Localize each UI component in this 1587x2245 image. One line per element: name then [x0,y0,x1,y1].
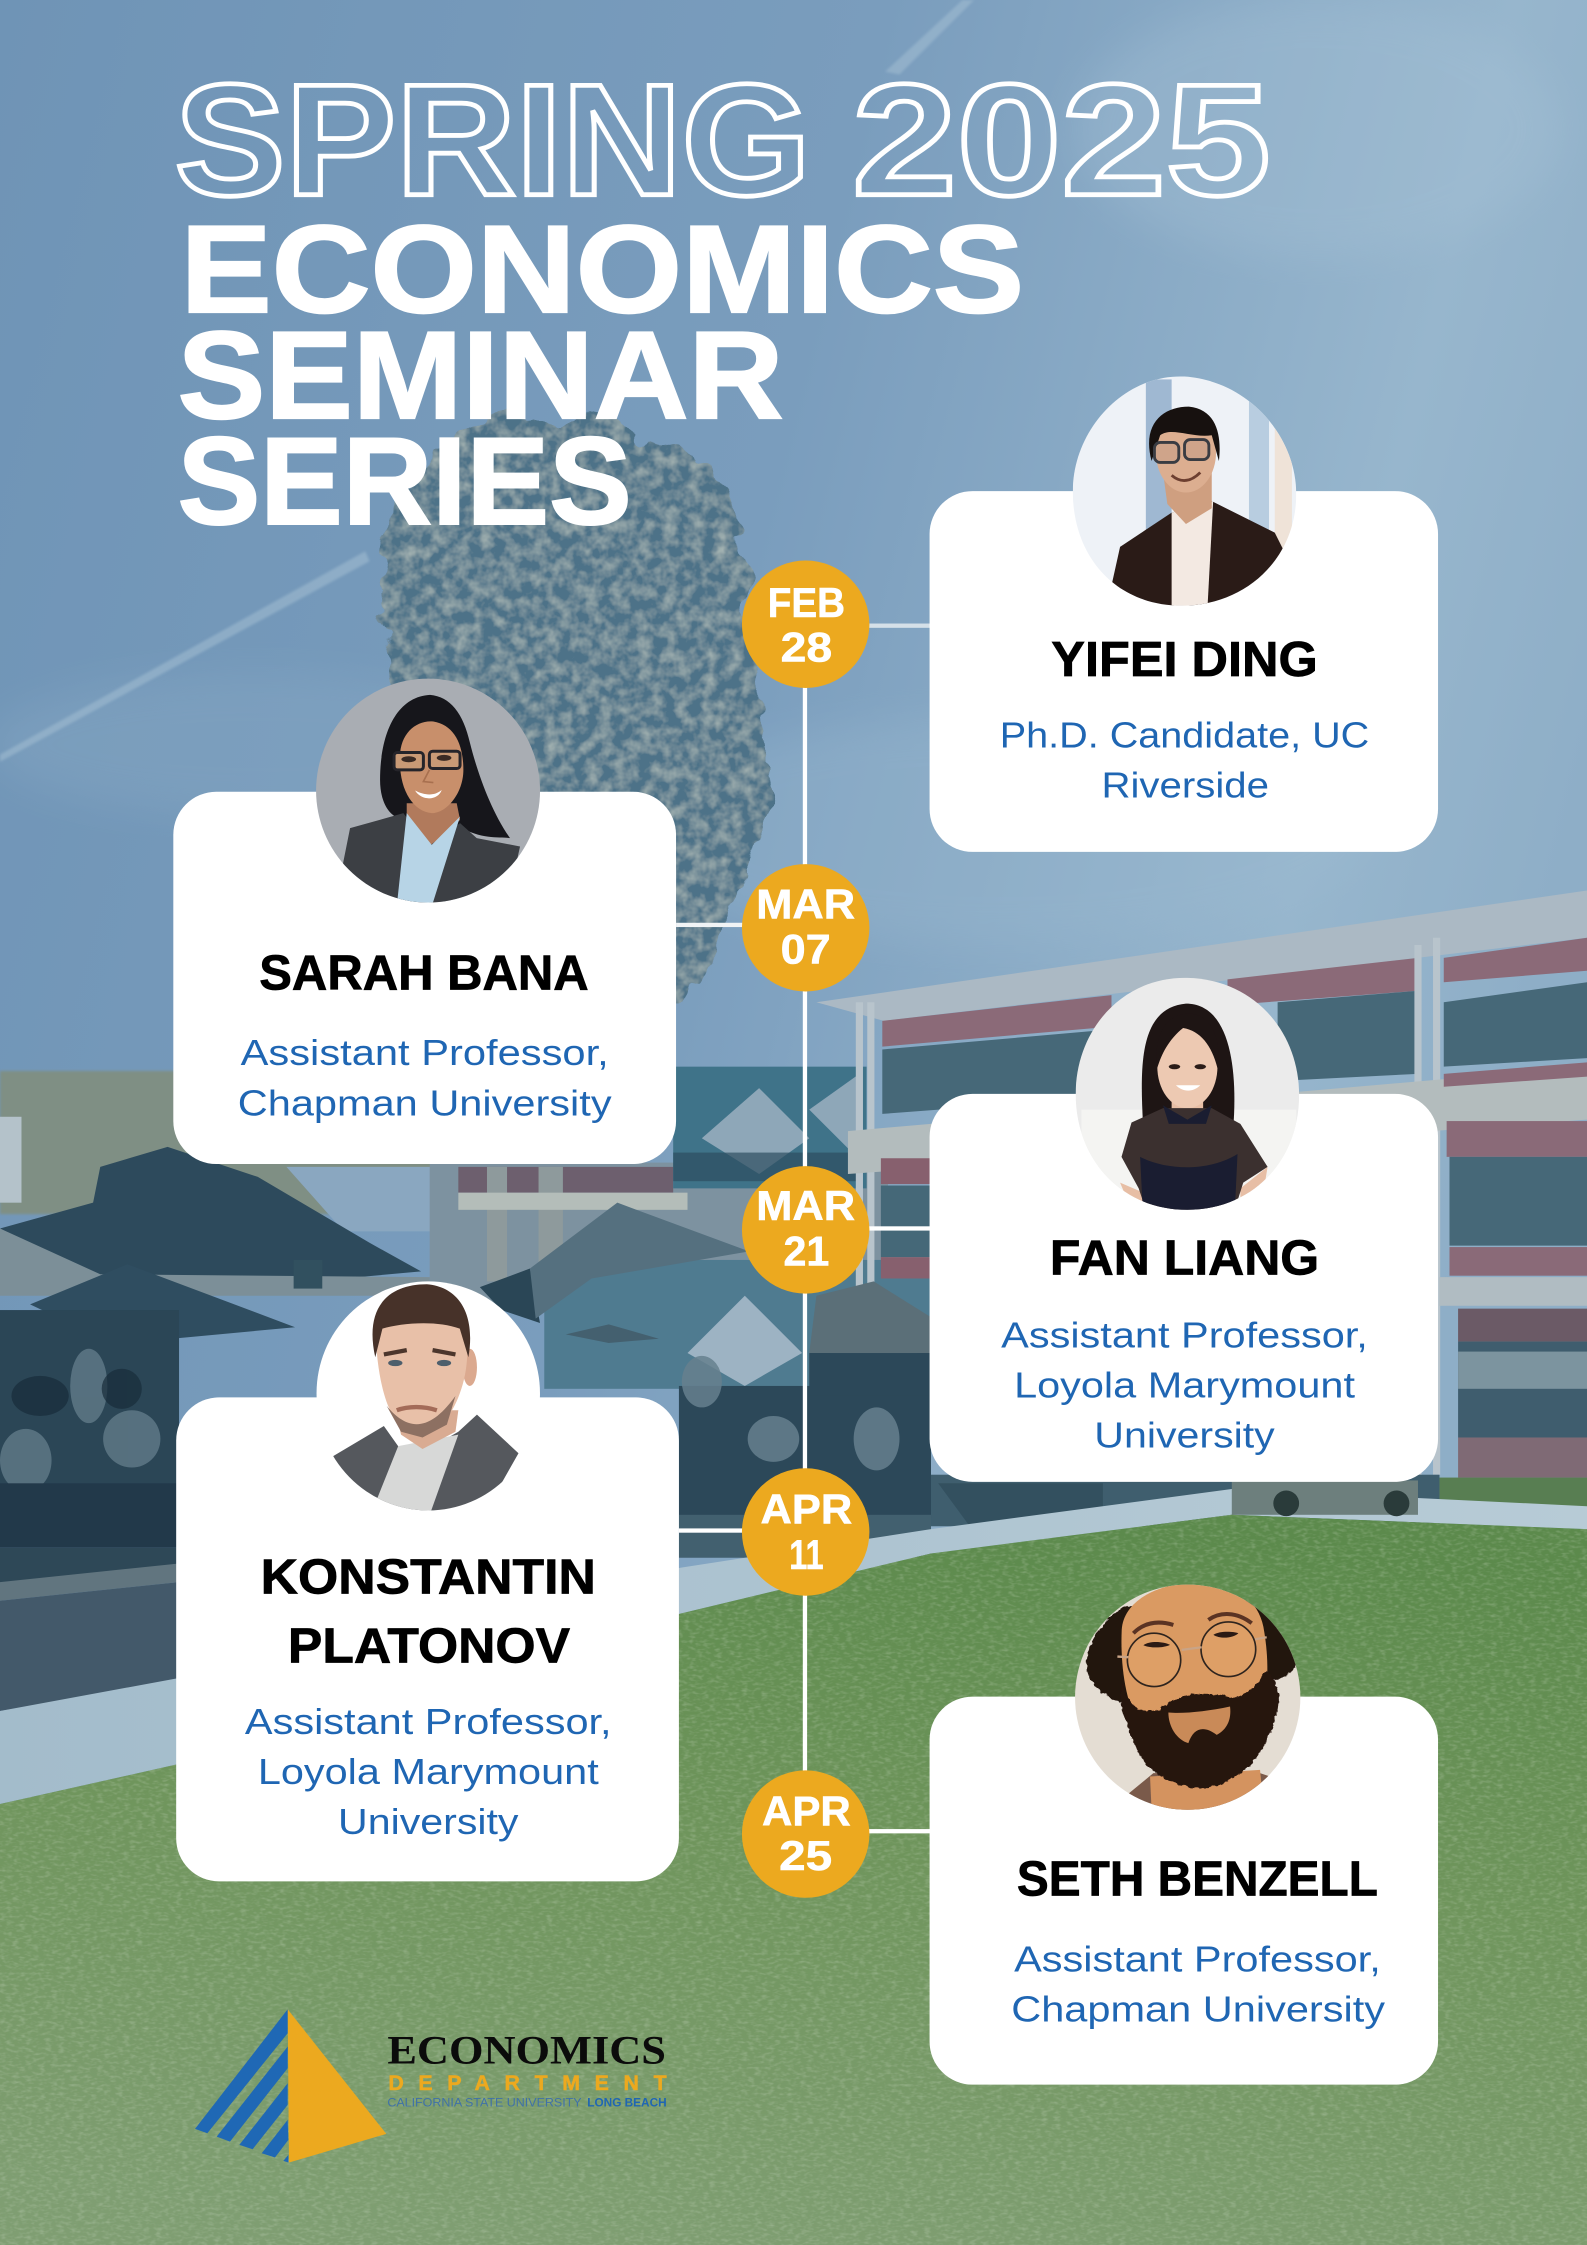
panel: Yifei Ding [930,372,1438,852]
role: Konstantin Platonov: Assistant Professor, [245,1702,612,1742]
date: Feb 28: FEB [768,579,845,626]
date: Mar 21: 21 [783,1228,829,1275]
portrait: Yifei Ding [1072,376,1296,606]
name: Sarah Bana: SARAH BANA [259,946,589,1000]
logo wordmark: ECONOMICS [387,2027,666,2072]
logo: economics department [195,2009,667,2163]
role: Yifei Ding: Riverside [1101,765,1269,805]
date: Apr 25: 25 [779,1832,832,1879]
date: Apr 25 [742,1770,869,1898]
name: Fan Liang: FAN LIANG [1050,1231,1319,1285]
portrait: Sarah Bana [313,677,543,913]
title line: spring 2025 outlined [175,51,1270,229]
role: Seth Benzell: Chapman University [1011,1990,1385,2030]
portrait: Fan Liang [1076,978,1299,1210]
date: Mar 21: MAR [756,1182,855,1229]
title [175,51,1270,551]
portrait: Seth Benzell [1073,1583,1303,1823]
role: Konstantin Platonov: Loyola Marymount [258,1752,599,1792]
panel: Sarah Bana [173,677,676,1164]
date: Mar 21 [742,1166,869,1294]
portrait: Konstantin Platonov [317,1281,540,1518]
date: Feb 28 [742,561,869,688]
date: Apr 11: 11 [789,1531,824,1578]
panel: Fan Liang [930,974,1438,1482]
name: Konstantin Platonov: PLATONOV [288,1619,571,1673]
role: Yifei Ding: Ph.D. Candidate, UC [1000,715,1369,755]
date: Apr 25: APR [762,1788,851,1834]
date: Mar 07 [742,864,869,991]
name: Konstantin Platonov [261,1551,596,1673]
date: Apr 11 [742,1468,869,1596]
role: Fan Liang: Loyola Marymount [1014,1365,1355,1405]
date: Mar 07: 07 [781,926,831,973]
timeline spine and connectors [676,624,931,1836]
title line: spring 2025 outlined: 2025 [852,51,1270,229]
name: Yifei Ding: YIFEI DING [1051,633,1318,687]
logo wordmark: LONG BEACH [587,2096,667,2110]
title line: series: SERIES [178,412,632,551]
role: Konstantin Platonov [245,1702,612,1842]
title line: economics: ECONOMICS [180,200,1024,339]
role: Fan Liang [1001,1315,1368,1456]
logo wordmark [387,2027,667,2110]
title line: seminar: SEMINAR [178,306,783,445]
panel: Konstantin Platonov [176,1281,679,1881]
role: Seth Benzell [1011,1940,1385,2030]
role: Yifei Ding [1000,715,1369,805]
date: Mar 07: MAR [756,880,855,927]
title line: spring 2025 outlined: SPRING [175,51,811,229]
role: Konstantin Platonov: University [338,1802,519,1842]
name: Seth Benzell: SETH BENZELL [1017,1853,1378,1907]
logo wordmark: CALIFORNIA STATE UNIVERSITY [387,2096,582,2110]
name: Konstantin Platonov: KONSTANTIN [261,1551,596,1605]
role: Sarah Bana [238,1033,612,1123]
role: Fan Liang: Assistant Professor, [1001,1315,1368,1355]
logo wordmark: DEPARTMENT [388,2071,667,2095]
role: Fan Liang: University [1094,1416,1275,1456]
panel: Seth Benzell [930,1583,1438,2085]
role: Sarah Bana: Chapman University [238,1083,612,1123]
role: Sarah Bana: Assistant Professor, [241,1033,609,1073]
date: Feb 28: 28 [781,623,832,670]
icon: pyramid [195,2009,386,2163]
date: Apr 11: APR [761,1485,852,1532]
role: Seth Benzell: Assistant Professor, [1014,1940,1381,1980]
